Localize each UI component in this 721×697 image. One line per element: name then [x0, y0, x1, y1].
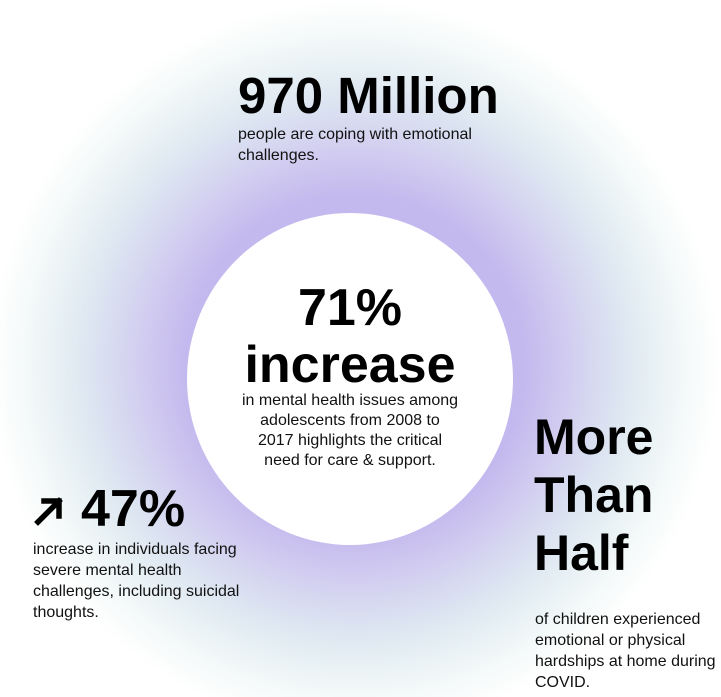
- stat: 47%: [33, 480, 239, 621]
- heading: 71% increase: [244, 279, 456, 394]
- text: 47% description: challenges, including suicidal: [33, 583, 239, 600]
- text: More Than Half description: emotional or physical: [535, 632, 685, 649]
- text: More Than Half description: hardships at home during: [535, 653, 716, 670]
- center circle: [187, 213, 513, 545]
- text: 47% description: [33, 541, 239, 621]
- text: 71% description: adolescents from 2008 to: [260, 412, 440, 429]
- text: 47% description: thoughts.: [33, 604, 99, 621]
- stat: 970 Million: [238, 67, 499, 164]
- heading: More Than Half: More: [534, 409, 653, 465]
- heading: 970 Million: 970 Million: [238, 67, 499, 124]
- stat: 71% increase: [242, 279, 458, 469]
- heading: 47% with arrow: 47%: [81, 480, 185, 538]
- heading: 71% increase: 71%: [298, 279, 402, 337]
- text: 71% description: in mental health issues among: [242, 392, 458, 409]
- text: More Than Half description: COVID.: [535, 674, 590, 691]
- text: 47% description: increase in individuals facing: [33, 541, 237, 558]
- heading: More Than Half: [534, 409, 653, 581]
- text: 970 Million description: people are coping with emotional: [238, 126, 472, 143]
- text: 47% description: severe mental health: [33, 562, 182, 579]
- icon: arrow up-right: [34, 497, 63, 526]
- heading: 47% with arrow: [34, 480, 185, 538]
- text: More Than Half description: [535, 611, 716, 691]
- text: More Than Half description: of children experienced: [535, 611, 700, 628]
- stat: More Than Half: [534, 409, 653, 581]
- heading: 71% increase: increase: [244, 336, 456, 394]
- text: 71% description: [242, 392, 458, 469]
- heading: More Than Half: Than: [534, 467, 653, 523]
- text: 970 Million description: challenges.: [238, 147, 319, 164]
- heading: More Than Half: Half: [534, 525, 628, 581]
- text: 71% description: need for care & support.: [264, 452, 436, 469]
- text: 71% description: 2017 highlights the critical: [258, 432, 442, 449]
- text: 970 Million description: [238, 126, 472, 164]
